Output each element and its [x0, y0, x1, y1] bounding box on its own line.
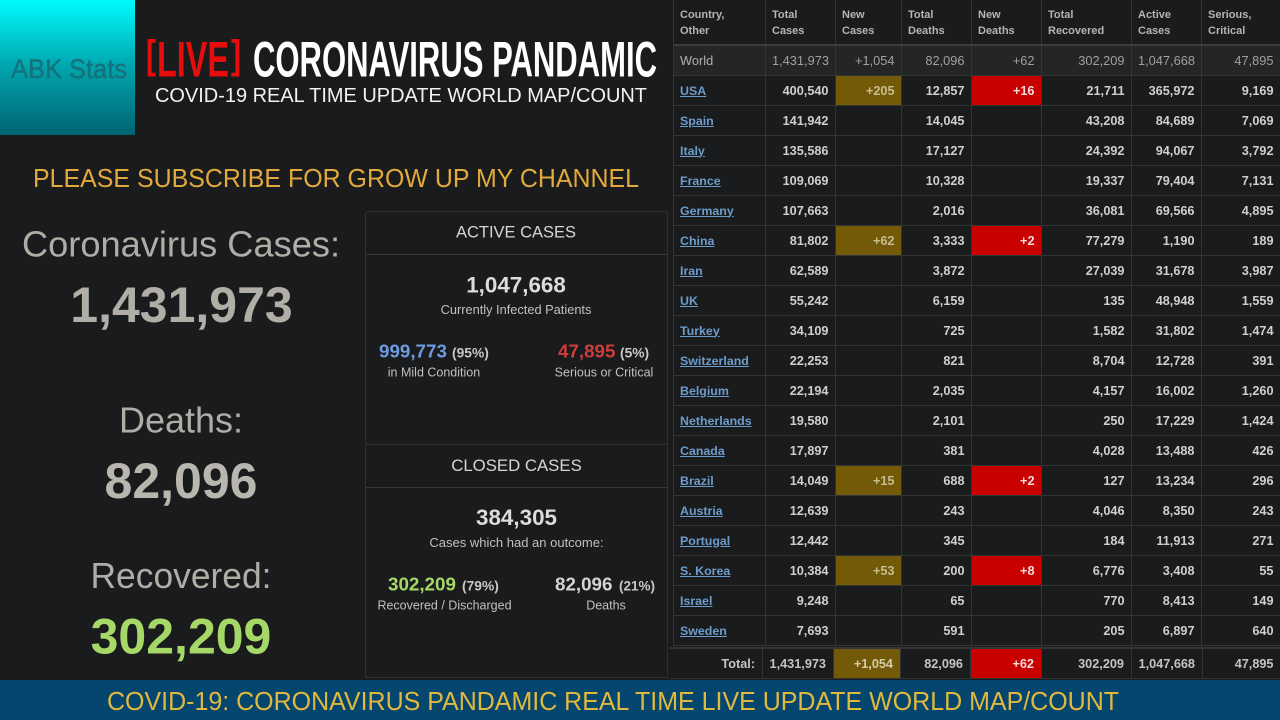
row: USA: +205	[866, 84, 894, 98]
row: World: World	[680, 53, 713, 68]
closed cases total: 384,305	[476, 505, 557, 530]
row: Italy: Italy	[680, 144, 705, 158]
row: France: 19,337	[1086, 174, 1124, 188]
row: UK: 55,242	[790, 294, 828, 308]
table header: New	[842, 9, 865, 21]
row: Spain: 14,045	[926, 114, 964, 128]
row: Switzerland: 8,704	[1093, 354, 1124, 368]
serious condition stat	[555, 340, 653, 380]
row: Belgium	[680, 384, 1274, 398]
closed cases caption: Cases which had an outcome:	[429, 535, 604, 550]
row: Austria: 243	[943, 504, 964, 518]
title: LIVE	[157, 32, 229, 88]
row: Switzerland: 12,728	[1156, 354, 1194, 368]
row: Canada: 13,488	[1156, 444, 1194, 458]
row: S. Korea: 200	[943, 564, 964, 578]
table header: Total	[908, 9, 933, 21]
row: Sweden: Sweden	[680, 624, 727, 638]
row: Germany: Germany	[680, 204, 734, 218]
row: Belgium: 1,260	[1242, 384, 1274, 398]
row: Germany: 107,663	[783, 204, 828, 218]
title	[146, 32, 657, 88]
deaths stat: (21%)	[619, 578, 655, 594]
row: Iran: 3,872	[933, 264, 964, 278]
row: Sweden: 7,693	[797, 624, 828, 638]
row: Austria: 4,046	[1093, 504, 1124, 518]
row: Netherlands	[680, 414, 1274, 428]
row: France: 7,131	[1242, 174, 1274, 188]
subscribe message: PLEASE SUBSCRIBE FOR GROW UP MY CHANNEL	[33, 163, 639, 193]
row: Brazil	[680, 466, 1274, 495]
row: Iran: Iran	[680, 264, 703, 278]
stat: recovered	[90, 555, 272, 664]
row: Italy: 135,586	[783, 144, 828, 158]
row: Austria: 243	[1252, 504, 1274, 518]
table header: Country,	[680, 9, 724, 21]
row: Italy: 3,792	[1242, 144, 1274, 158]
row: World	[674, 46, 1280, 75]
stat: coronavirus cases: Coronavirus Cases:	[22, 224, 340, 264]
mild condition stat: 999,773	[379, 340, 447, 362]
row: Brazil: 296	[1252, 474, 1274, 488]
deaths stat: 82,096	[555, 574, 612, 594]
row: Turkey: 34,109	[790, 324, 828, 338]
panel: closed cases	[365, 444, 668, 678]
row: Canada: 381	[943, 444, 964, 458]
stat: deaths: Deaths:	[119, 400, 243, 440]
row: USA: 365,972	[1149, 84, 1194, 98]
logo: ABK Stats	[0, 0, 135, 135]
row: USA: 9,169	[1242, 84, 1274, 98]
row: France	[680, 174, 1274, 188]
totals row: 47,895	[1235, 657, 1274, 671]
row: Turkey	[680, 324, 1274, 338]
row: Sweden: 591	[943, 624, 964, 638]
mild condition stat: (95%)	[452, 346, 489, 360]
row: USA: USA	[680, 84, 706, 98]
active cases caption: Currently Infected Patients	[441, 302, 591, 317]
table header: Deaths	[978, 24, 1015, 36]
active cases heading: ACTIVE CASES	[456, 224, 576, 242]
row: China: +62	[873, 234, 894, 248]
row: Netherlands: Netherlands	[680, 414, 752, 428]
row: Canada: 426	[1252, 444, 1274, 458]
row: France: 79,404	[1156, 174, 1194, 188]
closed cases heading: CLOSED CASES	[451, 456, 582, 475]
totals row: 82,096	[924, 657, 963, 671]
row: Netherlands: 1,424	[1242, 414, 1274, 428]
row: Iran: 62,589	[790, 264, 828, 278]
table header: Total	[1048, 9, 1073, 21]
stat: recovered: Recovered:	[90, 555, 272, 596]
row: Spain: 84,689	[1156, 114, 1194, 128]
row: France: France	[680, 174, 721, 188]
row: Brazil: 127	[1103, 474, 1124, 488]
row: Austria: 8,350	[1163, 504, 1194, 518]
row: World: 1,047,668	[1138, 53, 1195, 68]
row: Iran: 3,987	[1242, 264, 1274, 278]
row: Italy: 94,067	[1156, 144, 1194, 158]
serious condition stat: (5%)	[620, 346, 649, 360]
totals row: 1,431,973	[770, 657, 826, 671]
row: Portugal: 11,913	[1156, 534, 1194, 548]
table header: Cases	[842, 24, 874, 36]
row: Italy: 24,392	[1086, 144, 1124, 158]
row: China: 189	[1252, 234, 1274, 248]
serious condition stat: 47,895	[558, 340, 615, 362]
row: France: 109,069	[783, 174, 828, 188]
logo: ABK Stats: ABK Stats	[11, 54, 127, 84]
row: World: 302,209	[1078, 53, 1124, 68]
row: Germany: 4,895	[1242, 204, 1274, 218]
row: Germany: 69,566	[1156, 204, 1194, 218]
mild condition stat	[379, 340, 489, 380]
table header: Deaths	[908, 24, 945, 36]
row: S. Korea: 10,384	[790, 564, 828, 578]
stat: coronavirus cases: 1,431,973	[70, 277, 293, 333]
row: Portugal: 271	[1252, 534, 1274, 548]
totals row: 302,209	[1078, 657, 1124, 671]
table header: Recovered	[1048, 24, 1104, 36]
row: Brazil: +2	[1020, 474, 1034, 488]
row: Brazil: 688	[943, 474, 964, 488]
row: USA: 12,857	[926, 84, 964, 98]
row: Israel: 65	[950, 594, 964, 608]
row: USA: +16	[1013, 84, 1034, 98]
row: China: 1,190	[1163, 234, 1194, 248]
row: World: 1,431,973	[772, 53, 829, 68]
recovered stat: Recovered / Discharged	[377, 598, 512, 612]
row: S. Korea	[680, 556, 1274, 585]
stat: deaths	[105, 400, 257, 509]
row: UK: 48,948	[1156, 294, 1194, 308]
row: Israel: Israel	[680, 594, 712, 608]
row: Spain: 7,069	[1242, 114, 1274, 128]
row: Switzerland	[680, 354, 1274, 368]
row: Germany: 2,016	[933, 204, 964, 218]
totals row	[670, 647, 1280, 679]
row: Brazil: Brazil	[680, 474, 714, 488]
row: S. Korea: 3,408	[1163, 564, 1194, 578]
row: Belgium: 22,194	[790, 384, 828, 398]
row: Turkey: Turkey	[680, 324, 720, 338]
row: World: 82,096	[925, 53, 964, 68]
row: Brazil: 14,049	[790, 474, 828, 488]
row: S. Korea: +53	[873, 564, 894, 578]
row: Iran	[680, 264, 1274, 278]
row: Canada: Canada	[680, 444, 725, 458]
row: Spain: Spain	[680, 114, 714, 128]
row: Belgium: 2,035	[933, 384, 964, 398]
row: Brazil: +15	[873, 474, 894, 488]
bottom banner: COVID-19: CORONAVIRUS PANDAMIC REAL TIME LIVE UPDATE WORLD MAP/COUNT	[107, 688, 1119, 716]
row: Canada	[680, 444, 1274, 458]
row: Austria: Austria	[680, 504, 723, 518]
deaths stat: Deaths	[586, 598, 626, 612]
row: Belgium: 16,002	[1156, 384, 1194, 398]
stat: recovered: 302,209	[91, 608, 271, 664]
row: Switzerland: 22,253	[790, 354, 828, 368]
row: Turkey: 725	[943, 324, 964, 338]
table header: Serious,	[1208, 9, 1251, 21]
title: [	[146, 33, 156, 77]
row: Netherlands: 250	[1103, 414, 1124, 428]
row: Netherlands: 19,580	[790, 414, 828, 428]
row: Portugal: Portugal	[680, 534, 730, 548]
row: Italy: 17,127	[926, 144, 964, 158]
row: Spain	[680, 114, 1274, 128]
row: Israel: 770	[1103, 594, 1124, 608]
row: China: 3,333	[933, 234, 964, 248]
row: Netherlands: 17,229	[1156, 414, 1194, 428]
row: UK: 135	[1103, 294, 1124, 308]
row: China: 81,802	[790, 234, 828, 248]
row: USA	[680, 76, 1274, 105]
totals row: +62	[1012, 657, 1034, 671]
totals row: Total:	[721, 657, 755, 671]
bottom banner	[0, 680, 1280, 720]
row: Portugal: 345	[943, 534, 964, 548]
row: Israel: 8,413	[1163, 594, 1194, 608]
table header: Total	[772, 9, 797, 21]
title: CORONAVIRUS PANDAMIC	[253, 32, 657, 88]
row: Italy	[680, 144, 1274, 158]
stat: coronavirus cases	[22, 224, 340, 333]
row: Turkey: 1,582	[1093, 324, 1124, 338]
row: Turkey: 1,474	[1242, 324, 1274, 338]
row: Spain: 141,942	[783, 114, 828, 128]
mild condition stat: in Mild Condition	[388, 366, 480, 380]
row: Iran: 27,039	[1086, 264, 1124, 278]
totals row: 1,047,668	[1139, 657, 1195, 671]
stat: deaths: 82,096	[105, 453, 257, 509]
row: Austria: 12,639	[790, 504, 828, 518]
row: Portugal: 12,442	[790, 534, 828, 548]
row: Germany	[680, 204, 1274, 218]
row: Sweden: 640	[1252, 624, 1274, 638]
row: Portugal	[680, 534, 1274, 548]
table header	[674, 9, 1280, 638]
recovered stat: 302,209	[388, 574, 456, 594]
table header: Cases	[1138, 24, 1170, 36]
table header: Cases	[772, 24, 804, 36]
row: Israel	[680, 594, 1274, 608]
row: Brazil: 13,234	[1156, 474, 1194, 488]
row: USA: 400,540	[783, 84, 828, 98]
table header: Active	[1138, 9, 1171, 21]
row: World: +62	[1013, 53, 1034, 68]
row: S. Korea: +8	[1020, 564, 1034, 578]
row: S. Korea: S. Korea	[680, 564, 730, 578]
row: Austria	[680, 504, 1274, 518]
row: UK	[680, 294, 1274, 308]
panel: active cases	[365, 212, 668, 444]
table header: Critical	[1208, 24, 1245, 36]
serious condition stat: Serious or Critical	[555, 366, 653, 380]
row: Sweden: 6,897	[1163, 624, 1194, 638]
row: China: +2	[1020, 234, 1034, 248]
deaths stat	[555, 574, 655, 612]
row: Netherlands: 2,101	[933, 414, 964, 428]
row: Belgium: 4,157	[1093, 384, 1124, 398]
title: ]	[231, 33, 241, 77]
row: China: 77,279	[1086, 234, 1124, 248]
row: Canada: 17,897	[790, 444, 828, 458]
row: Switzerland: Switzerland	[680, 354, 749, 368]
row: Turkey: 31,802	[1156, 324, 1194, 338]
subtitle: COVID-19 REAL TIME UPDATE WORLD MAP/COUNT	[155, 84, 647, 107]
table header: New	[978, 9, 1001, 21]
row: China: China	[680, 234, 714, 248]
row: Canada: 4,028	[1093, 444, 1124, 458]
row: USA: 21,711	[1086, 84, 1124, 98]
row: Portugal: 184	[1103, 534, 1124, 548]
row: S. Korea: 55	[1259, 564, 1274, 578]
row: Israel: 9,248	[797, 594, 828, 608]
active cases total: 1,047,668	[466, 272, 566, 298]
row: France: 10,328	[926, 174, 964, 188]
row: Sweden	[680, 624, 1274, 638]
row: Germany: 36,081	[1086, 204, 1124, 218]
totals row: +1,054	[854, 657, 893, 671]
recovered stat	[377, 574, 512, 612]
country data table	[673, 0, 1280, 646]
row: World: 47,895	[1234, 53, 1274, 68]
row: Sweden: 205	[1103, 624, 1124, 638]
row: S. Korea: 6,776	[1093, 564, 1124, 578]
row: Belgium: Belgium	[680, 384, 729, 398]
row: Israel: 149	[1252, 594, 1274, 608]
recovered stat: (79%)	[462, 578, 499, 594]
row: Switzerland: 821	[943, 354, 964, 368]
row: World: +1,054	[855, 53, 894, 68]
row: Switzerland: 391	[1252, 354, 1274, 368]
row: UK: UK	[680, 294, 698, 308]
row: China	[680, 226, 1274, 255]
row: UK: 6,159	[933, 294, 964, 308]
row: Spain: 43,208	[1086, 114, 1124, 128]
table header: Other	[680, 24, 709, 36]
row: UK: 1,559	[1242, 294, 1274, 308]
row: Iran: 31,678	[1156, 264, 1194, 278]
